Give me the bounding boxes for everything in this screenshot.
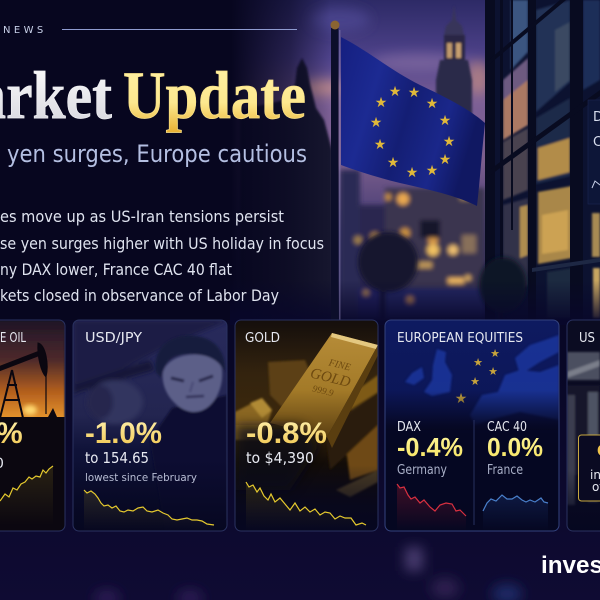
EU flag xyxy=(341,37,485,206)
flag stars: ★ xyxy=(439,152,451,168)
EU stars on map: ★ xyxy=(455,391,467,407)
panel: USD/JPY: USD/JPY xyxy=(85,331,142,346)
flag stars: ★ xyxy=(439,113,451,129)
panel: USD/JPY xyxy=(73,320,230,531)
title xyxy=(0,57,306,133)
glass office building xyxy=(485,0,600,320)
panel: gold: to $4,390 xyxy=(246,449,314,467)
gold bar engraving: GOLD xyxy=(308,365,352,391)
DAX figures: Germany xyxy=(397,463,447,478)
CAC 40 figures: France xyxy=(487,463,523,478)
panel: USD/JPY: lowest since February xyxy=(85,472,197,484)
panel: USD/JPY: to 154.65 xyxy=(85,449,149,467)
flag stars: ★ xyxy=(426,96,438,112)
panel: crude oil: E OIL xyxy=(0,331,27,346)
flag stars: ★ xyxy=(374,137,386,153)
news label: NEWS xyxy=(3,25,47,36)
gold bar engraving: FINE xyxy=(326,357,352,374)
DAX figures: -0.4% xyxy=(397,432,463,462)
callout box xyxy=(578,435,600,501)
panel: gold xyxy=(235,320,380,531)
panel: crude oil xyxy=(0,320,65,531)
bullet list xyxy=(0,207,324,305)
EU stars on map: ★ xyxy=(473,356,483,369)
flag stars: ★ xyxy=(408,85,420,101)
flag stars xyxy=(370,84,455,181)
left building silhouette xyxy=(240,58,332,320)
tower xyxy=(436,5,472,125)
bullet list: kets closed in observance of Labor Day xyxy=(0,286,279,305)
flag stars: ★ xyxy=(406,165,418,181)
bottom fade xyxy=(230,280,600,325)
gold bar xyxy=(270,333,380,448)
banknote and portrait image xyxy=(73,320,230,424)
flag stars: ★ xyxy=(370,115,382,131)
CAC 40 figures: CAC 40 xyxy=(487,420,527,435)
tree right xyxy=(479,257,527,320)
chart: DAX xyxy=(396,484,466,524)
panel: gold: -0.8% xyxy=(246,417,327,450)
background photo: European city at dusk xyxy=(0,0,600,325)
chart: CAC 40 xyxy=(482,494,548,522)
lit buildings below flag xyxy=(340,170,485,320)
bullet list: se yen surges higher with US holiday in focus xyxy=(0,234,324,253)
left-side dark fade xyxy=(0,0,330,320)
panel: gold: GOLD xyxy=(245,331,280,346)
gold bars image xyxy=(235,360,378,497)
chart: oil price xyxy=(0,466,54,508)
bokeh lights xyxy=(94,547,522,600)
panel: US markets xyxy=(567,320,600,531)
side panel at right edge xyxy=(588,100,600,204)
tree left xyxy=(358,232,418,320)
bullet list: ny DAX lower, France CAC 40 flat xyxy=(0,260,232,279)
EU stars on map: ★ xyxy=(470,375,480,388)
DAX figures xyxy=(397,420,463,478)
gold bar engraving: 999.9 xyxy=(311,384,335,399)
EU stars on map: ★ xyxy=(488,365,498,378)
chart: gold line xyxy=(246,482,366,531)
bullet list: es move up as US-Iran tensions persist xyxy=(0,207,284,226)
chart: USD/JPY line xyxy=(84,490,214,526)
EU stars on map: ★ xyxy=(490,347,500,360)
EU stars on map xyxy=(456,349,500,403)
CAC 40 figures xyxy=(487,420,543,478)
panel: European equities: EUROPEAN EQUITIES xyxy=(397,331,523,346)
flag stars: ★ xyxy=(426,163,438,179)
CAC 40 figures: 0.0% xyxy=(487,432,543,462)
DAX figures: DAX xyxy=(397,420,421,435)
building columns image xyxy=(567,352,600,505)
panel: European equities xyxy=(385,320,559,531)
subtitle: yen surges, Europe cautious xyxy=(7,140,307,168)
panel: US markets: US xyxy=(579,331,595,346)
map of Europe xyxy=(405,335,559,425)
gold bar engraving xyxy=(311,359,352,396)
flag stars: ★ xyxy=(443,134,455,150)
flag stars: ★ xyxy=(387,155,399,171)
panel: USD/JPY: -1.0% xyxy=(85,417,162,450)
flagpole xyxy=(330,20,340,323)
flag stars: ★ xyxy=(389,84,401,100)
title: Update xyxy=(123,57,306,133)
icon: oil pump silhouette xyxy=(0,342,64,422)
flag stars: ★ xyxy=(375,95,387,111)
